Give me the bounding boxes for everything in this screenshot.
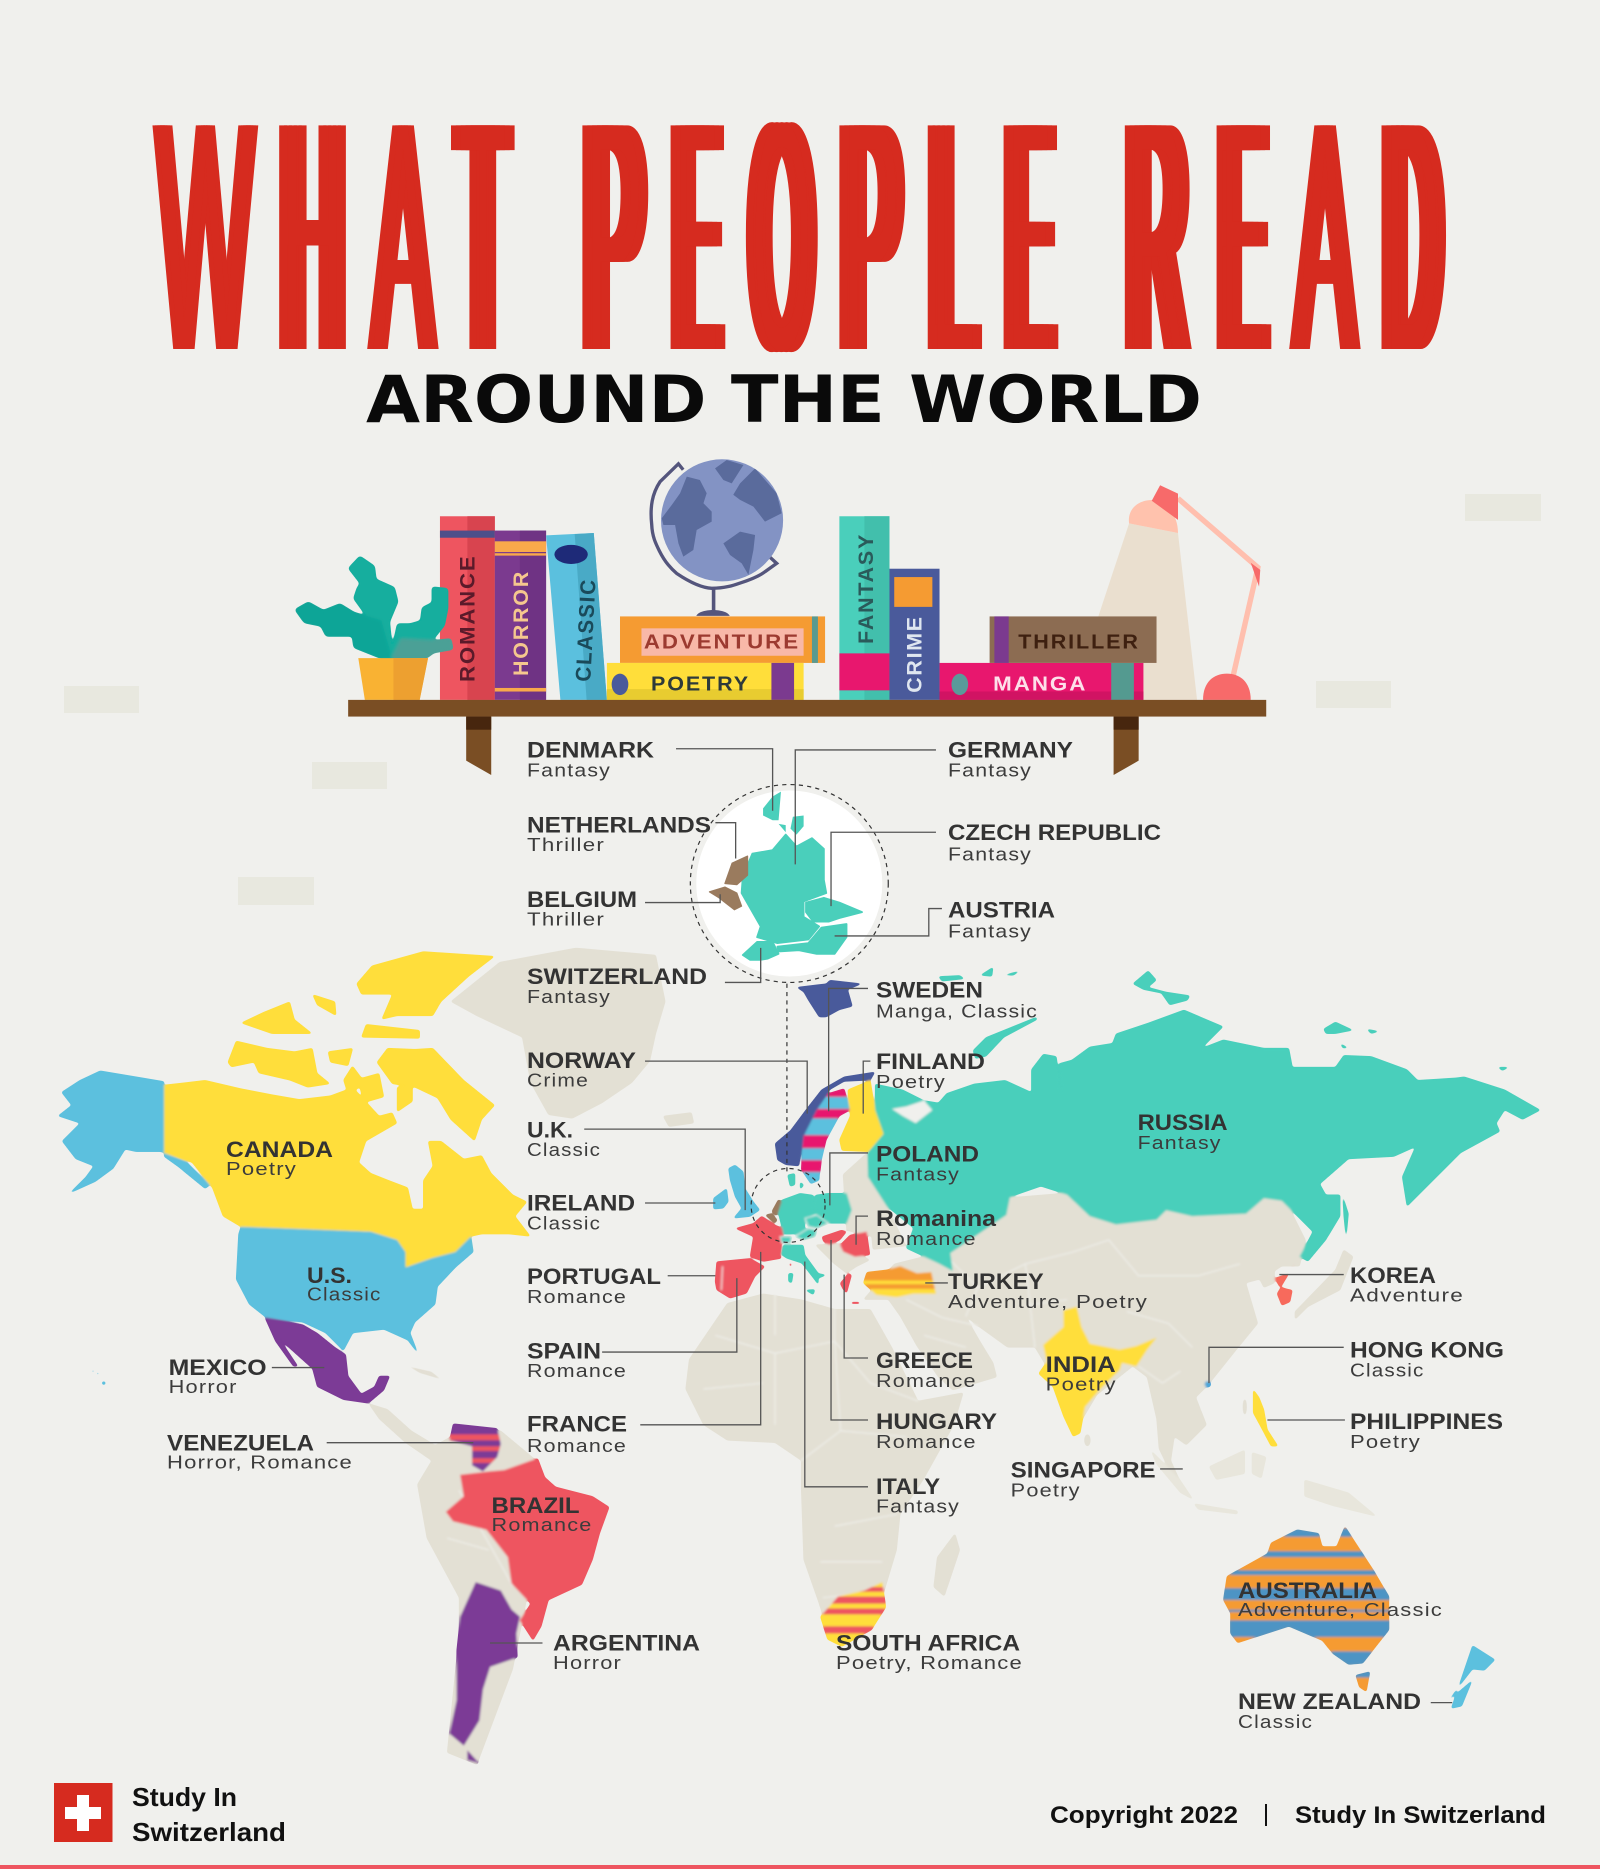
label: U.K. — [527, 1118, 601, 1160]
label: Brazil — [492, 1493, 592, 1535]
locator dashed lines and mini circle — [751, 984, 825, 1242]
label: India — [1046, 1352, 1117, 1395]
label: Poland — [876, 1142, 979, 1185]
book: poetry — [607, 663, 804, 700]
inset: Central Europe zoom — [690, 785, 888, 982]
footer brand name: Study In — [132, 1782, 237, 1812]
country: Brazil — [446, 1458, 609, 1641]
borders — [447, 1240, 1240, 1633]
world map — [58, 948, 1540, 1765]
label: Sweden: Manga, Classic — [876, 1002, 1038, 1022]
label: Portugal: Romance — [527, 1287, 627, 1307]
footer logo: Swiss flag — [54, 1783, 112, 1842]
label: France: Romance — [527, 1436, 627, 1456]
label: Hungary: Romance — [876, 1432, 977, 1452]
label: Hungary: HUNGARY — [876, 1409, 997, 1434]
lamp — [1071, 485, 1260, 700]
title: R — [1128, 55, 1186, 418]
label: Germany — [948, 738, 1073, 781]
landmass: Central and South America — [368, 1365, 537, 1765]
label: Singapore: SINGAPORE — [1011, 1458, 1156, 1483]
inset: Germany — [742, 835, 826, 943]
label: Czech Republic: Fantasy — [948, 845, 1032, 865]
label: Italy: ITALY — [876, 1474, 940, 1499]
label: Portugal — [527, 1264, 661, 1307]
label: France: FRANCE — [527, 1411, 627, 1436]
label: Austria: AUSTRIA — [948, 898, 1055, 923]
title: D — [1385, 55, 1440, 418]
book: thriller: THRILLER — [1018, 632, 1140, 654]
country: Hong Kong — [1205, 1381, 1211, 1387]
label: Romania — [876, 1206, 997, 1249]
country: Russia — [868, 967, 1540, 1271]
book: classic — [546, 533, 607, 700]
label: Greece — [876, 1348, 977, 1391]
book: horror — [495, 531, 546, 700]
label: Korea: Adventure — [1350, 1286, 1464, 1306]
country: Norway — [775, 1072, 875, 1166]
label: New Zealand: NEW ZEALAND — [1238, 1689, 1421, 1714]
label: U.S.: Classic — [307, 1285, 382, 1305]
country: Turkey — [863, 1265, 937, 1298]
country: Philippines — [1253, 1389, 1278, 1446]
footer copyright — [1050, 1802, 1546, 1829]
country: Korea — [1275, 1264, 1295, 1306]
book: manga: MANGA — [993, 673, 1087, 695]
country: South Africa — [820, 1582, 886, 1646]
label: Switzerland: SWITZERLAND — [527, 964, 707, 989]
book: poetry: POETRY — [651, 673, 750, 695]
label: Australia: Adventure, Classic — [1238, 1600, 1443, 1620]
title: H — [282, 55, 343, 418]
plant — [297, 558, 452, 657]
footer bar — [0, 1865, 1600, 1869]
label: Romania: Romance — [876, 1229, 977, 1249]
title: P — [585, 55, 643, 418]
country: Venezuela — [448, 1424, 502, 1472]
label: Czech Republic: CZECH REPUBLIC — [948, 820, 1161, 845]
label: U.K.: Classic — [527, 1140, 601, 1160]
label: Belgium — [527, 887, 637, 930]
shelf — [348, 700, 1266, 775]
country: Alaska, U.S. — [58, 1071, 210, 1385]
book: classic: CLASSIC — [571, 577, 601, 682]
label: Hungary — [876, 1409, 997, 1452]
countries: Netherlands and Belgium — [765, 1199, 782, 1223]
label: Belgium: BELGIUM — [527, 887, 637, 912]
label: Spain: SPAIN — [527, 1339, 601, 1364]
label: Poland: POLAND — [876, 1142, 979, 1167]
label: Turkey: Adventure, Poetry — [948, 1292, 1148, 1312]
footer brand name — [132, 1782, 286, 1847]
label: Belgium: Thriller — [527, 910, 605, 930]
label: Korea: KOREA — [1350, 1263, 1436, 1288]
label: Greece: GREECE — [876, 1348, 973, 1373]
label: Norway — [527, 1048, 636, 1091]
countries: Hungary and Romania — [822, 1230, 870, 1257]
label: Austria — [948, 898, 1055, 942]
footer brand name: Switzerland — [132, 1817, 286, 1847]
footer copyright: Study In Switzerland — [1295, 1802, 1546, 1829]
label: Finland: FINLAND — [876, 1049, 985, 1074]
label: Russia — [1138, 1110, 1228, 1153]
label: Argentina — [553, 1631, 700, 1673]
label: Sweden — [876, 978, 1038, 1022]
label: Russia: Fantasy — [1138, 1133, 1222, 1153]
country: Canada — [164, 951, 531, 1267]
label: Russia: RUSSIA — [1138, 1110, 1228, 1135]
label: Philippines: PHILIPPINES — [1350, 1409, 1503, 1434]
white sea notch — [892, 1100, 932, 1123]
book: fantasy — [839, 516, 889, 700]
inset: Netherlands and Belgium — [709, 856, 748, 910]
label: Australia: AUSTRALIA — [1238, 1578, 1377, 1603]
country: New Zealand — [1447, 1645, 1495, 1709]
label: Norway: Crime — [527, 1071, 589, 1091]
title: A — [1295, 55, 1355, 418]
label: Singapore: Poetry — [1011, 1481, 1081, 1501]
country: United States — [236, 1227, 473, 1354]
country: India — [1038, 1307, 1157, 1437]
country: Australia — [1223, 1527, 1390, 1692]
label: Turkey — [948, 1269, 1148, 1312]
label: Ireland — [527, 1191, 635, 1233]
country: Svalbard, Norway group — [796, 980, 862, 1017]
label: Brazil: Romance — [492, 1515, 592, 1535]
label: India: Poetry — [1046, 1375, 1117, 1395]
label: Portugal: PORTUGAL — [527, 1264, 661, 1289]
label: Ireland: IRELAND — [527, 1191, 635, 1216]
label: India: INDIA — [1046, 1352, 1116, 1377]
label: Switzerland — [527, 964, 707, 1007]
label: Ireland: Classic — [527, 1213, 601, 1233]
label: Canada: CANADA — [226, 1137, 333, 1162]
label: Norway: NORWAY — [527, 1048, 636, 1073]
label: U.S. — [307, 1263, 382, 1305]
label: Philippines: Poetry — [1350, 1432, 1421, 1452]
label: Canada — [226, 1137, 333, 1179]
country: Spain and Portugal — [715, 1258, 765, 1298]
title: P — [842, 55, 900, 418]
label: Poland: Fantasy — [876, 1165, 960, 1185]
label: Czech Republic — [948, 820, 1161, 865]
label: Netherlands: Thriller — [527, 835, 605, 855]
country: UK and Ireland — [713, 1165, 760, 1218]
title: L — [931, 55, 975, 418]
book: romance: ROMANCE — [456, 554, 480, 682]
subtitle: AROUND THE WORLD — [366, 363, 1202, 438]
label: Spain: Romance — [527, 1361, 627, 1381]
label: Italy — [876, 1474, 960, 1517]
label: Venezuela: Horror, Romance — [167, 1453, 353, 1473]
label: Philippines — [1350, 1409, 1503, 1452]
landmass: Indonesia and New Guinea — [1151, 1450, 1377, 1517]
book: thriller — [990, 616, 1157, 663]
label: Finland — [876, 1049, 985, 1092]
country: Italy — [782, 1245, 827, 1295]
label: U.S.: U.S. — [307, 1263, 352, 1288]
title — [152, 55, 1446, 418]
label: Germany: Fantasy — [948, 761, 1032, 781]
inset: Denmark — [763, 792, 804, 835]
country: Argentina — [449, 1582, 520, 1763]
book: manga — [940, 663, 1143, 700]
label: Korea — [1350, 1263, 1464, 1306]
label: New Zealand: Classic — [1238, 1712, 1313, 1732]
book: romance — [440, 516, 495, 700]
label: U.K.: U.K. — [527, 1118, 573, 1143]
label: Netherlands — [527, 813, 711, 855]
label: Singapore — [1011, 1458, 1156, 1501]
countries: Central Europe — [778, 1173, 852, 1243]
country: Finland — [839, 1080, 883, 1152]
book: adventure: ADVENTURE — [644, 632, 800, 654]
label: France — [527, 1411, 627, 1456]
label: Argentina: Horror — [553, 1653, 622, 1673]
label: Sweden: SWEDEN — [876, 978, 983, 1003]
plant pot — [358, 658, 428, 700]
book: crime — [889, 569, 940, 700]
title: E — [1008, 55, 1051, 418]
connector lines — [272, 749, 1452, 1703]
book: horror: HORROR — [509, 570, 533, 676]
landmass: Asia and Eastern Europe — [815, 1153, 1353, 1487]
label: Switzerland: Fantasy — [527, 987, 611, 1007]
label: Venezuela: VENEZUELA — [167, 1431, 314, 1456]
label: Hong Kong: Classic — [1350, 1361, 1424, 1381]
decorative wall bricks — [64, 494, 1541, 905]
title: O — [752, 55, 812, 418]
label: South Africa — [836, 1631, 1023, 1673]
footer copyright: Copyright 2022 — [1050, 1802, 1238, 1829]
label: Greece: Romance — [876, 1371, 977, 1391]
country: Mexico — [265, 1317, 390, 1403]
label: Romania: Romanina — [876, 1206, 997, 1231]
country: France — [735, 1216, 792, 1268]
title: E — [1221, 55, 1264, 418]
label: Spain — [527, 1339, 627, 1381]
label: Australia — [1238, 1578, 1443, 1620]
label: Finland: Poetry — [876, 1072, 946, 1092]
label: Mexico: Horror — [169, 1377, 238, 1397]
bookshelf illustration — [297, 459, 1266, 775]
country: Sweden — [799, 1088, 852, 1184]
label: Hong Kong — [1350, 1338, 1504, 1381]
landmass: Africa — [686, 1294, 963, 1639]
book: adventure — [620, 616, 825, 663]
label: Denmark: DENMARK — [527, 738, 654, 763]
globe — [651, 459, 783, 616]
label: Netherlands: NETHERLANDS — [527, 813, 711, 838]
label: Argentina: ARGENTINA — [553, 1631, 700, 1656]
book: fantasy: FANTASY — [854, 533, 878, 644]
label: Germany: GERMANY — [948, 738, 1073, 763]
title: W — [157, 55, 254, 418]
label: Venezuela — [167, 1431, 353, 1473]
label: South Africa: Poetry, Romance — [836, 1653, 1023, 1673]
title: A — [373, 55, 433, 418]
label: Italy: Fantasy — [876, 1497, 960, 1517]
label: Canada: Poetry — [226, 1159, 297, 1179]
landmass: Greenland and Iceland — [451, 948, 694, 1127]
label: Denmark — [527, 738, 654, 781]
inset: Czech Republic, Austria, Switzerland — [743, 898, 862, 960]
label: Hong Kong: HONG KONG — [1350, 1338, 1504, 1363]
label: Mexico: MEXICO — [169, 1355, 267, 1380]
label: Brazil: BRAZIL — [492, 1493, 580, 1518]
label: Turkey: TURKEY — [948, 1269, 1044, 1294]
country: Greece — [840, 1273, 860, 1304]
book: crime: CRIME — [903, 615, 927, 693]
label: New Zealand — [1238, 1689, 1421, 1732]
label: Mexico — [169, 1355, 267, 1397]
label: Austria: Fantasy — [948, 922, 1032, 942]
title: T — [459, 55, 507, 418]
label: South Africa: SOUTH AFRICA — [836, 1631, 1020, 1656]
label: Denmark: Fantasy — [527, 761, 611, 781]
title: E — [675, 55, 718, 418]
